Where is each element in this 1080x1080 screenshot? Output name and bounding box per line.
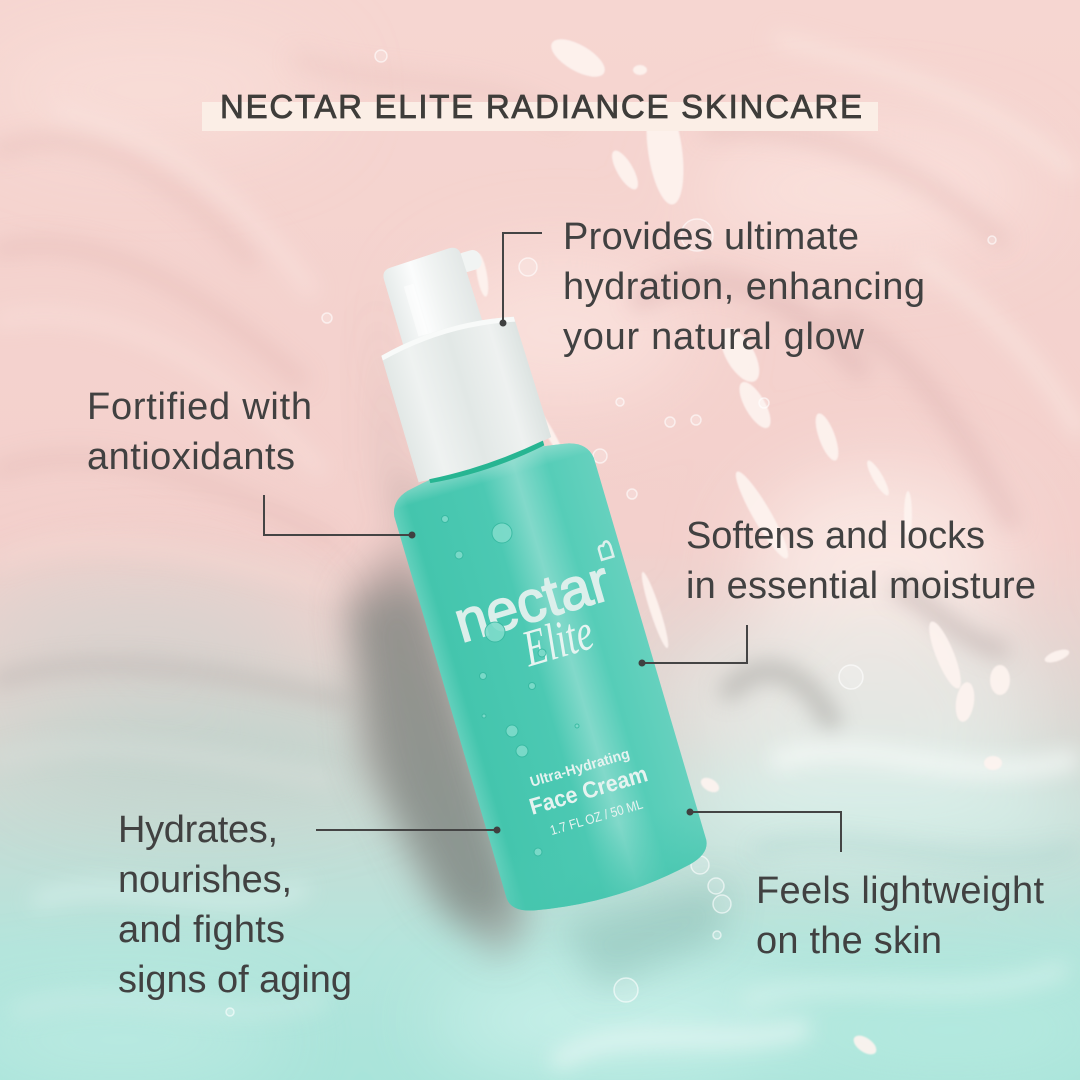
callout: lightweight: Feels lightweight: [756, 870, 1044, 912]
water droplets: [226, 50, 996, 1016]
pump top: [381, 240, 501, 354]
product name: Face Cream: [526, 760, 651, 820]
title: NECTAR ELITE RADIANCE SKINCARE: [220, 88, 862, 125]
callout: lightweight: [686, 808, 1044, 962]
brand logo: Elite: [516, 604, 600, 678]
callout: aging: Hydrates,: [118, 809, 278, 851]
callout: moisture: Softens and locks: [686, 515, 985, 557]
callout: lightweight: on the skin: [756, 920, 942, 962]
callout: aging: and fights: [118, 909, 285, 951]
product bottle: [326, 226, 714, 925]
callout: hydration: Provides ultimate: [563, 216, 859, 258]
brand logo: nectar: [447, 548, 617, 655]
callout: aging: signs of aging: [118, 959, 352, 1001]
callout: aging: [118, 809, 500, 1001]
product name: 1.7 FL OZ / 50 ML: [548, 796, 645, 838]
bottle shadow: [345, 290, 730, 990]
callout: antioxidants: [87, 386, 416, 538]
callout: antioxidants: antioxidants: [87, 436, 295, 478]
callout: hydration: your natural glow: [563, 316, 865, 358]
callout: aging: nourishes,: [118, 859, 292, 901]
cap: [379, 309, 555, 489]
product name: Ultra-Hydrating: [528, 746, 632, 791]
callout: moisture: [638, 515, 1036, 666]
callout: antioxidants: Fortified with: [87, 386, 312, 428]
brand logo: [446, 541, 640, 695]
callout: hydration: [500, 216, 925, 358]
callout: moisture: in essential moisture: [686, 565, 1036, 607]
bottle droplets: [442, 516, 579, 856]
product name: [521, 743, 657, 842]
bottle body: [386, 430, 714, 925]
water splashes: [473, 32, 1071, 1058]
callout: hydration: hydration, enhancing: [563, 266, 925, 308]
